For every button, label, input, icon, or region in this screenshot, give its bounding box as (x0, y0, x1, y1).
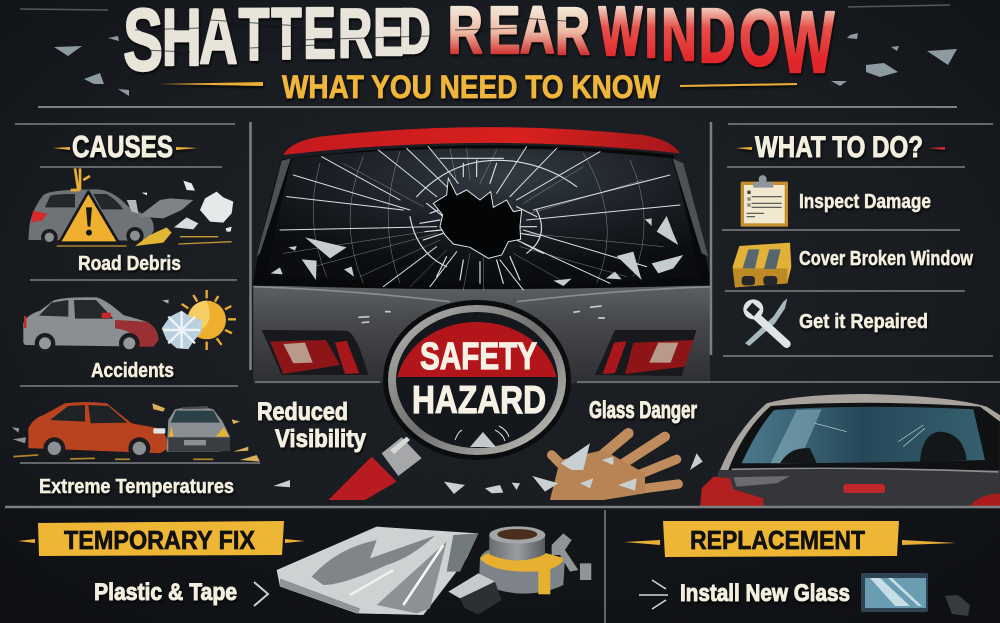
icon: injured hand with shards (273, 433, 703, 500)
arrow lines (639, 580, 668, 609)
right taillight (595, 330, 697, 376)
panel: temporary fix (18, 521, 591, 615)
glass shards around title (20, 5, 957, 96)
icon: yellow cover kit (733, 243, 791, 287)
cracks (280, 147, 680, 290)
left taillight (262, 330, 368, 375)
panel: shattered rear window (253, 127, 712, 383)
trunk highlights (253, 287, 710, 302)
rear glass (253, 145, 712, 289)
impact hole (433, 178, 522, 258)
causes heading: CAUSES (72, 129, 173, 164)
icon: crossed wrench and screwdriver (743, 298, 787, 346)
icon: roll of tape (448, 526, 591, 614)
icon: new glass pane (861, 573, 970, 616)
accidents label: Accidents (91, 360, 174, 382)
icon: grey car with snowflake and sun (23, 290, 236, 354)
replacement banner: REPLACEMENT (690, 525, 865, 555)
safety hazard badge (383, 300, 571, 460)
install new glass label: Install New Glass (680, 580, 850, 607)
icon: magnifying glass handle (328, 437, 422, 500)
subtitle (158, 69, 797, 105)
inspect damage label: Inspect Damage (799, 191, 931, 213)
panel: causes (12, 129, 260, 498)
title (123, 0, 835, 91)
icon: road debris car with warning triangle (28, 168, 233, 246)
subtitle: WHAT YOU NEED TO KNOW (282, 69, 661, 105)
plastic and tape label: Plastic & Tape (94, 579, 237, 606)
extreme temperatures label: Extreme Temperatures (39, 476, 234, 498)
temporary fix banner (18, 521, 305, 556)
icon: intact rear car (700, 394, 1000, 507)
fallen glass shards (271, 216, 683, 286)
temporary fix banner: TEMPORARY FIX (64, 525, 256, 555)
panel: what to do (733, 131, 973, 346)
icon: red car colliding with silver car (12, 402, 260, 462)
reduced visibility label (257, 398, 366, 453)
car body (253, 286, 710, 383)
reduced visibility label: Reduced (257, 398, 348, 426)
icon: plastic sheet (277, 527, 478, 615)
glass danger label: Glass Danger (589, 397, 697, 424)
safety hazard badge: HAZARD (412, 379, 546, 422)
safety hazard badge: SAFETY (420, 336, 537, 378)
red spoiler (283, 127, 680, 155)
window pillars (257, 158, 708, 257)
icon: clipboard (741, 175, 788, 227)
replacement banner (624, 521, 957, 557)
arrow (254, 582, 268, 606)
what to do heading: WHAT TO DO? (755, 131, 923, 164)
reduced visibility label: Visibility (275, 425, 366, 453)
get it repaired label: Get it Repaired (799, 311, 928, 333)
panel: replacement (624, 521, 970, 616)
road debris label: Road Debris (78, 253, 181, 275)
